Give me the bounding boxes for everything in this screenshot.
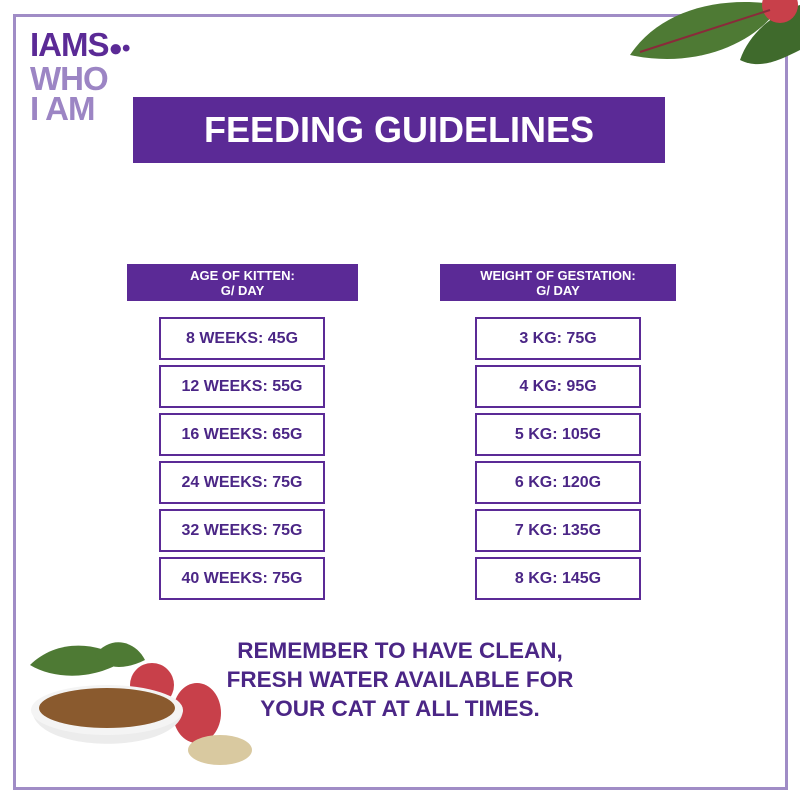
logo: IAMS who I am: I AM [30,90,94,127]
title banner: FEEDING GUIDELINES [204,109,594,150]
right column boxes: 3 KG: 75G [519,330,597,347]
left column boxes: 8 WEEKS: 45G [186,330,298,347]
icon: food bowl with beets [30,642,252,765]
logo: IAMS who I am [30,26,130,127]
right column boxes [475,317,641,600]
left column header: AGE OF KITTEN: [190,268,295,283]
left column boxes: 24 WEEKS: 75G [182,474,302,491]
right column boxes: 5 KG: 105G [515,426,601,443]
reminder text: YOUR CAT AT ALL TIMES. [260,696,540,721]
right column boxes: 4 KG: 95G [519,378,597,395]
left column boxes: 12 WEEKS: 55G [182,378,302,395]
right column header [440,264,676,301]
logo: IAMS who I am: WHO [30,60,108,97]
right column boxes: 7 KG: 135G [515,522,601,539]
title banner [133,97,665,163]
logo: IAMS who I am: IAMS●• [30,26,129,63]
right column header: WEIGHT OF GESTATION: [480,268,636,283]
left column boxes [159,317,325,600]
left column boxes: 16 WEEKS: 65G [182,426,302,443]
left column header: G/ DAY [221,283,264,298]
right column boxes: 6 KG: 120G [515,474,601,491]
left column header [127,264,358,301]
decoration: leaves top right [630,0,800,64]
left column boxes: 32 WEEKS: 75G [182,522,302,539]
right column boxes: 8 KG: 145G [515,570,601,587]
left column boxes: 40 WEEKS: 75G [182,570,302,587]
reminder text [227,638,573,721]
reminder text: REMEMBER TO HAVE CLEAN, [237,638,563,663]
reminder text: FRESH WATER AVAILABLE FOR [227,667,573,692]
right column header: G/ DAY [536,283,580,298]
